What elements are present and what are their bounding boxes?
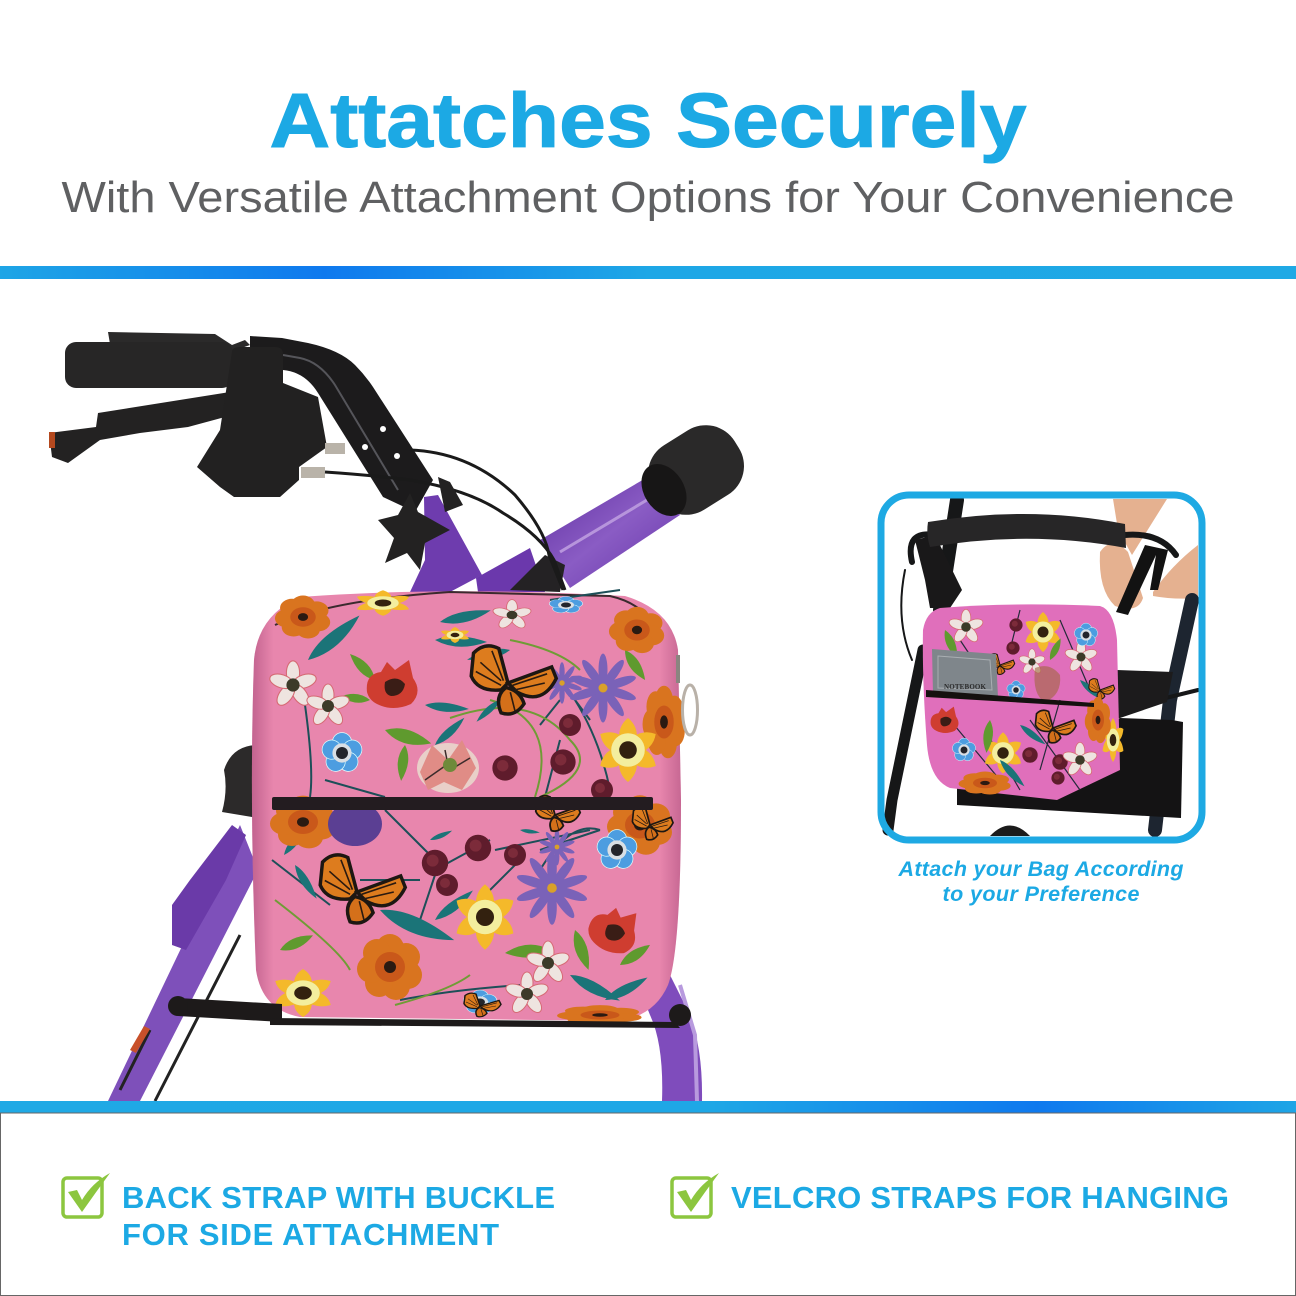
icon: green check box: [63, 1173, 110, 1217]
stems and leaves: [272, 590, 620, 1005]
bottom divider bar: [0, 1101, 1296, 1113]
inset storage pouch: [957, 718, 1183, 818]
walker rear lower frame: [108, 745, 702, 1101]
purple pansy: [328, 802, 382, 846]
inset pocket strap: [926, 690, 1094, 707]
product photo: walker with floral bag: [49, 332, 757, 1101]
inset seat: [1115, 670, 1173, 718]
feature text: back strap: FOR SIDE ATTACHMENT: [122, 1217, 499, 1252]
floral bag: [168, 590, 698, 1028]
footer panel: [0, 1113, 1296, 1296]
inset walker frame: [888, 500, 1198, 830]
inset caption: to your Preference: [942, 882, 1140, 906]
bag body: [252, 591, 681, 1021]
bag zipper ring: [676, 655, 698, 735]
inset brake cluster: [915, 535, 962, 608]
notebook: NOTEBOOK: [944, 683, 987, 691]
inset caption: [898, 857, 1184, 906]
butterflies: [471, 646, 556, 714]
notebook: [932, 649, 998, 698]
icon: green check box: [672, 1173, 719, 1217]
inset arms and hands: [1100, 499, 1198, 609]
brake cables: [325, 450, 565, 590]
check item: back strap: [63, 1173, 555, 1252]
peony flower: [417, 740, 479, 793]
inset rounded border: [881, 495, 1202, 840]
subtitle: With Versatile Attachment Options for Your Convenience: [62, 173, 1234, 222]
walker purple arm with foam bumper: [410, 412, 757, 592]
feature text: back strap: [122, 1180, 555, 1252]
title: Attatches Securely: [270, 78, 1027, 164]
front pocket strap: [272, 797, 653, 810]
star adjustment knob: [378, 493, 450, 570]
top divider bar: [0, 266, 1296, 279]
flowers: [275, 596, 330, 638]
feature text: back strap: BACK STRAP WITH BUCKLE: [122, 1180, 555, 1215]
feature text: velcro: VELCRO STRAPS FOR HANGING: [731, 1180, 1229, 1215]
inset photo panel: [881, 495, 1202, 906]
inset floral bag: [923, 604, 1125, 800]
check item: velcro: [672, 1173, 1229, 1217]
inset glasses in pocket: [1034, 666, 1060, 702]
walker handle and brake lever: [49, 332, 565, 590]
lower strap bar: [168, 996, 691, 1028]
inset photo scene: [881, 495, 1202, 840]
inset caption: Attach your Bag According: [898, 857, 1184, 881]
